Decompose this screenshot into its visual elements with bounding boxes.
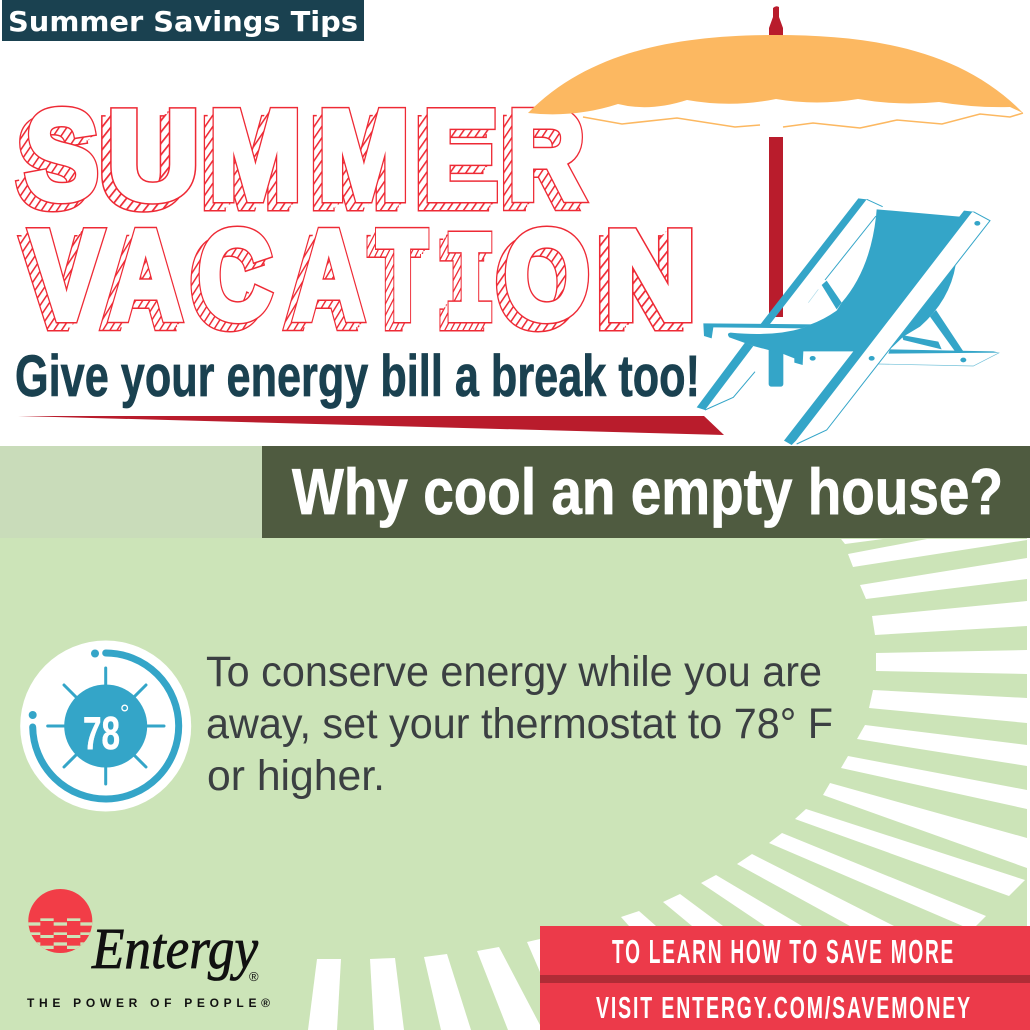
title: SUMMER VACATION: N xyxy=(598,210,691,352)
title: SUMMER VACATION: C xyxy=(195,207,269,349)
title: SUMMER VACATION: A xyxy=(293,205,365,347)
title: SUMMER VACATION: O xyxy=(504,205,590,347)
title: SUMMER VACATION: A xyxy=(288,211,359,352)
title: SUMMER VACATION: S xyxy=(25,85,99,227)
title: SUMMER VACATION: A xyxy=(109,205,182,347)
logo: Entergy xyxy=(25,888,270,1010)
title: SUMMER VACATION: V xyxy=(24,211,97,352)
title: SUMMER VACATION: T xyxy=(377,204,427,346)
title: SUMMER VACATION: O xyxy=(504,205,590,347)
title: SUMMER VACATION: T xyxy=(372,209,422,352)
title: SUMMER VACATION: S xyxy=(25,85,99,227)
title: SUMMER VACATION: S xyxy=(16,93,90,235)
icon: thermostat: 78 xyxy=(83,707,120,759)
title: SUMMER VACATION: U xyxy=(101,90,194,232)
title: SUMMER VACATION: V xyxy=(27,208,100,350)
subtitle: Give your energy bill a break too! xyxy=(15,344,700,409)
title: SUMMER VACATION: C xyxy=(198,205,272,346)
title: SUMMER VACATION: E xyxy=(417,90,492,232)
title: SUMMER VACATION: O xyxy=(498,210,584,352)
title: SUMMER VACATION: S xyxy=(16,93,90,235)
title: SUMMER VACATION xyxy=(16,84,697,366)
title: SUMMER VACATION: A xyxy=(109,205,182,347)
body text: To conserve energy while you are xyxy=(206,648,822,696)
title: SUMMER VACATION: E xyxy=(414,93,489,234)
title: SUMMER VACATION: M xyxy=(318,86,410,227)
tag: Summer Savings Tips: Summer Savings Tips xyxy=(8,5,358,38)
title: SUMMER VACATION: N xyxy=(604,205,697,347)
logo: Entergy: THE POWER OF PEOPLE® xyxy=(27,996,270,1010)
title: SUMMER VACATION: E xyxy=(423,85,498,226)
title: SUMMER VACATION: C xyxy=(190,213,264,354)
title: SUMMER VACATION: M xyxy=(209,85,302,227)
title: SUMMER VACATION: T xyxy=(374,207,425,349)
title: SUMMER VACATION: M xyxy=(200,93,293,235)
title: SUMMER VACATION: R xyxy=(502,90,579,232)
title: SUMMER VACATION: U xyxy=(107,85,200,227)
title: SUMMER VACATION: U xyxy=(98,93,191,235)
icon: beach chair xyxy=(697,198,999,445)
title: SUMMER VACATION: M xyxy=(200,93,293,235)
title: SUMMER VACATION: R xyxy=(500,92,577,234)
banner: Why cool an empty house? xyxy=(0,446,1030,538)
logo: Entergy: Entergy xyxy=(91,916,258,981)
title: SUMMER VACATION: A xyxy=(106,208,180,349)
title: SUMMER VACATION: A xyxy=(290,208,362,350)
panel: green lower background xyxy=(0,538,1027,1030)
title: SUMMER VACATION: T xyxy=(369,212,419,354)
body text: away, set your thermostat to 78° F xyxy=(206,700,833,748)
title: SUMMER VACATION: I xyxy=(441,216,493,360)
title: SUMMER VACATION: A xyxy=(101,213,174,355)
sun rays xyxy=(308,539,1027,1030)
title: SUMMER VACATION: S xyxy=(22,88,96,229)
title: SUMMER VACATION: N xyxy=(595,213,688,355)
call to action box xyxy=(540,926,1030,1030)
title: SUMMER VACATION: N xyxy=(595,213,688,355)
title: SUMMER VACATION: M xyxy=(309,94,401,235)
title: SUMMER VACATION: V xyxy=(30,205,103,347)
title: SUMMER VACATION: O xyxy=(495,213,581,355)
title: SUMMER VACATION: I xyxy=(436,222,488,366)
title: SUMMER VACATION: E xyxy=(414,93,489,234)
title: SUMMER VACATION: I xyxy=(439,219,490,363)
title: SUMMER VACATION: A xyxy=(101,213,174,355)
title: SUMMER VACATION: A xyxy=(284,213,356,355)
body text: or higher. xyxy=(207,752,385,800)
title: SUMMER VACATION: U xyxy=(104,87,197,230)
title: SUMMER VACATION: E xyxy=(423,85,498,226)
title: SUMMER VACATION: M xyxy=(206,88,298,229)
title: SUMMER VACATION: R xyxy=(505,87,582,229)
title: SUMMER VACATION: M xyxy=(315,88,406,230)
title: SUMMER VACATION: M xyxy=(309,94,401,235)
title: SUMMER VACATION: M xyxy=(312,91,403,232)
title: SUMMER VACATION: I xyxy=(444,214,496,358)
title: SUMMER VACATION: T xyxy=(377,204,427,346)
title: SUMMER VACATION: C xyxy=(190,213,264,354)
title: SUMMER VACATION: O xyxy=(495,213,581,355)
title: SUMMER VACATION: V xyxy=(21,213,94,355)
body text xyxy=(206,648,833,800)
title: SUMMER VACATION: R xyxy=(508,84,585,226)
title: SUMMER VACATION: A xyxy=(284,213,356,355)
title: SUMMER VACATION: N xyxy=(604,205,697,347)
title: SUMMER VACATION: A xyxy=(293,205,365,347)
title: SUMMER VACATION: U xyxy=(107,85,200,227)
title: SUMMER VACATION: U xyxy=(98,93,191,235)
title: SUMMER VACATION: M xyxy=(209,85,302,227)
title: SUMMER VACATION: N xyxy=(601,207,694,350)
red underline wedge xyxy=(18,416,724,435)
title: SUMMER VACATION: A xyxy=(103,211,177,352)
title: SUMMER VACATION: O xyxy=(501,208,587,349)
title: SUMMER VACATION: R xyxy=(500,92,577,234)
icon: beach umbrella xyxy=(528,6,1023,317)
title: SUMMER VACATION: C xyxy=(192,210,267,352)
title: SUMMER VACATION: M xyxy=(318,86,410,227)
title: SUMMER VACATION: V xyxy=(21,213,94,355)
title: SUMMER VACATION: R xyxy=(508,84,585,226)
title: SUMMER VACATION: E xyxy=(420,88,495,229)
logo: Entergy: ® xyxy=(249,969,259,984)
title: SUMMER VACATION: C xyxy=(198,205,272,346)
title: SUMMER VACATION: I xyxy=(444,214,496,358)
icon: thermostat xyxy=(20,640,191,812)
title: SUMMER VACATION: T xyxy=(369,212,419,354)
title: SUMMER VACATION: I xyxy=(436,222,488,366)
title: SUMMER VACATION: S xyxy=(19,90,93,232)
title: SUMMER VACATION: M xyxy=(203,91,295,232)
title: SUMMER VACATION: V xyxy=(30,205,103,347)
